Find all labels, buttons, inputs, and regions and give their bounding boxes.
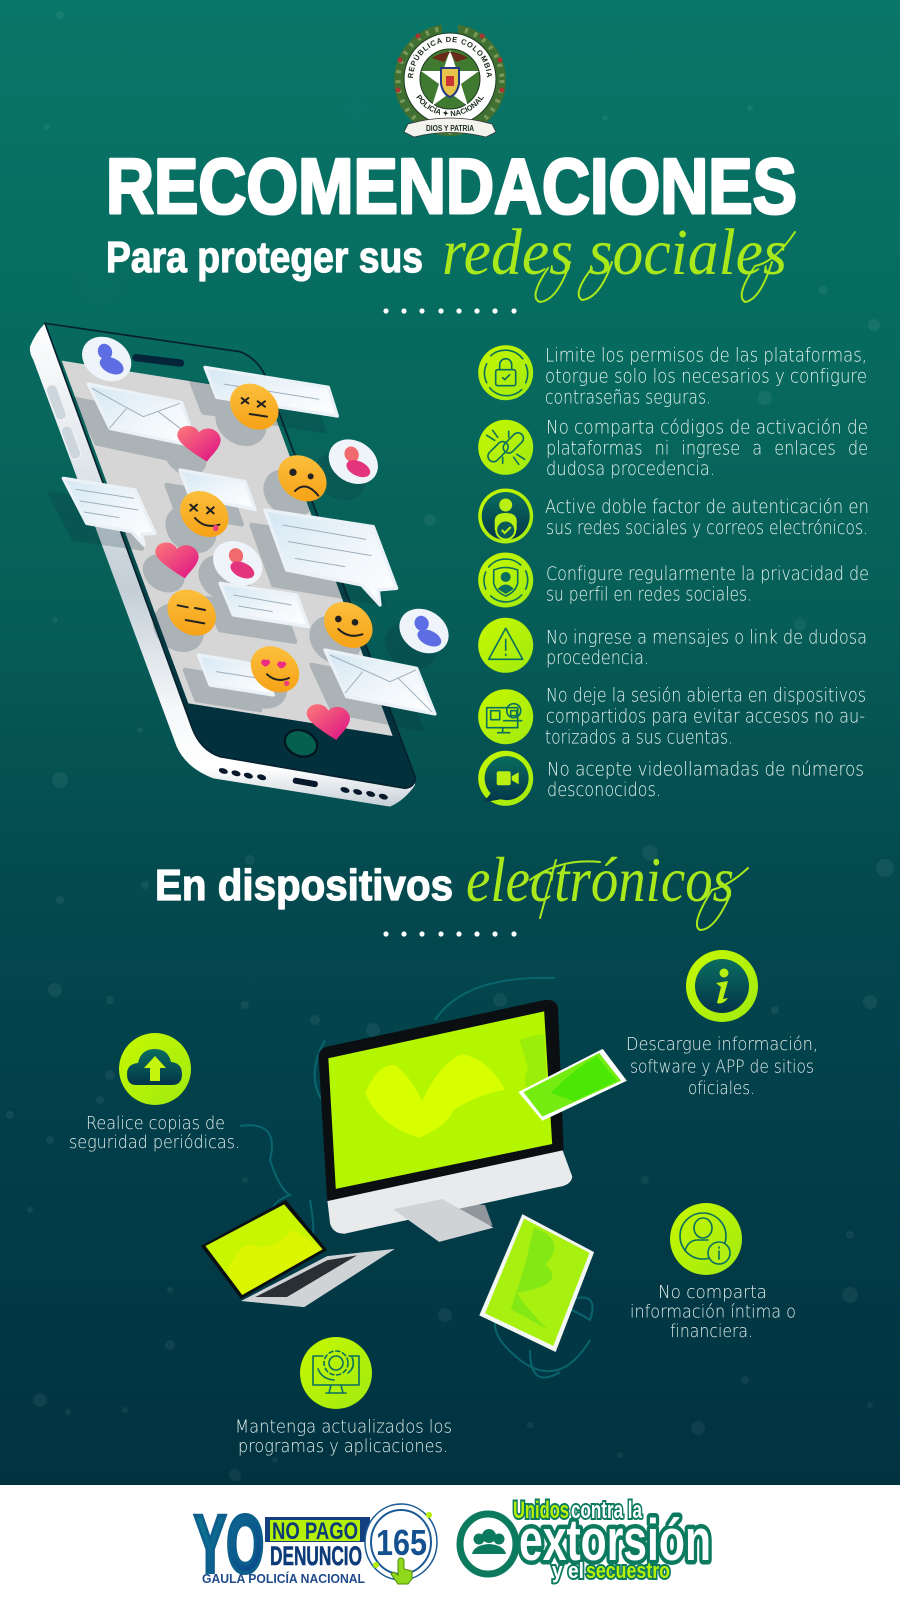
text: procedencia. bbox=[546, 648, 649, 669]
heart middle bbox=[155, 543, 199, 578]
avatar pink center bbox=[205, 532, 271, 595]
connecting swirl lines bbox=[240, 978, 592, 1378]
icon: broken chain bbox=[478, 420, 533, 475]
subtitle white: Para proteger sus bbox=[106, 233, 423, 282]
icon: video chat bbox=[478, 751, 533, 806]
165 badge bbox=[365, 1504, 437, 1580]
screen wave bbox=[365, 1054, 505, 1138]
divider dots bbox=[383, 308, 517, 314]
monitor chin bbox=[327, 1150, 572, 1234]
YO letters: YO bbox=[194, 1499, 264, 1590]
monitor stand back bbox=[453, 1201, 492, 1228]
item 3: doble factor bbox=[478, 488, 869, 544]
icon: warning triangle bbox=[478, 618, 533, 673]
ribbon: DIOS Y PATRIA bbox=[426, 124, 474, 133]
text: Realice copias de bbox=[86, 1113, 225, 1134]
text: información íntima o bbox=[630, 1302, 796, 1322]
device tip: info bbox=[626, 950, 818, 1099]
text: financiera. bbox=[670, 1321, 753, 1342]
monitor screen bbox=[328, 1011, 552, 1189]
seal text: REPÚBLICA DE COLOMBIA bbox=[408, 36, 492, 78]
text: torizados a sus cuentas. bbox=[545, 727, 733, 748]
heart top bbox=[177, 426, 221, 462]
text bbox=[545, 686, 866, 748]
logo: unidos contra la extorsión bbox=[460, 1497, 711, 1583]
subtitle script: redes sociales: redes sociales bbox=[442, 216, 787, 289]
secuestro: secuestro bbox=[586, 1558, 670, 1583]
text: No comparta bbox=[658, 1282, 767, 1303]
emoji dizzy bbox=[221, 374, 288, 439]
bubble left bbox=[63, 478, 155, 545]
ring with people icon bbox=[460, 1514, 516, 1574]
side buttons bbox=[45, 383, 82, 461]
text bbox=[545, 346, 867, 408]
text: Mantenga actualizados los bbox=[235, 1417, 452, 1438]
text: contraseñas seguras. bbox=[545, 388, 711, 408]
screen blob right bbox=[519, 1034, 548, 1101]
tablet bbox=[479, 1214, 594, 1352]
monitor frame bbox=[319, 1000, 564, 1201]
icon: user check bbox=[478, 488, 533, 544]
text bbox=[69, 1113, 240, 1153]
element shadows bbox=[50, 382, 442, 729]
section heading script: electrónicos: electrónicos bbox=[466, 844, 734, 915]
divider dots bbox=[383, 931, 517, 937]
text: No acepte videollamadas de números bbox=[547, 760, 864, 781]
unidos: Unidos bbox=[513, 1497, 569, 1524]
text: Active doble factor de autenticación en bbox=[545, 497, 869, 518]
emoji tongue bbox=[171, 481, 238, 547]
text: Descargue información, bbox=[626, 1034, 818, 1055]
extorsión: extorsión bbox=[519, 1508, 711, 1573]
wreath bbox=[394, 20, 506, 136]
heart bottom bbox=[307, 704, 350, 740]
seal lower text: POLICÍA ✦ NACIONAL bbox=[416, 94, 484, 116]
screen bbox=[62, 361, 393, 736]
text: seguridad periódicas. bbox=[69, 1132, 240, 1153]
item 2: enlaces bbox=[478, 418, 868, 480]
speaker bbox=[132, 354, 185, 367]
small phone bbox=[518, 1049, 627, 1121]
y el: y el bbox=[552, 1558, 584, 1583]
section heading white: En dispositivos bbox=[155, 861, 453, 910]
device tip: updates bbox=[235, 1337, 452, 1457]
inner green disc bbox=[420, 49, 480, 109]
police emblem bbox=[394, 24, 506, 138]
flourishes bbox=[536, 232, 795, 302]
envelope top bbox=[88, 384, 197, 447]
bubble center bbox=[180, 470, 255, 509]
devices illustration bbox=[201, 1000, 627, 1352]
text: dudosa procedencia. bbox=[546, 459, 715, 480]
icon: info bbox=[686, 950, 758, 1022]
text: Limite los permisos de las plataformas, bbox=[545, 346, 867, 366]
white footer bbox=[0, 1485, 900, 1600]
speaker holes and port bbox=[218, 767, 389, 801]
avatar pink right bbox=[320, 430, 386, 493]
icon: cloud upload bbox=[119, 1033, 191, 1105]
item 7: videollamadas bbox=[478, 751, 864, 806]
envelope bottom bbox=[325, 650, 435, 714]
icon: padlock bbox=[478, 345, 533, 400]
text bbox=[547, 760, 864, 801]
bubble lower bbox=[198, 655, 273, 695]
logo: yo no pago yo denuncio bbox=[194, 1499, 437, 1590]
avatar blue right bbox=[391, 600, 457, 662]
emoji hearts bbox=[242, 637, 308, 702]
emoji smile bbox=[315, 592, 382, 658]
no pago box: NO PAGO bbox=[272, 1518, 358, 1545]
icon: computer lock bbox=[478, 689, 533, 744]
star and shield bbox=[421, 50, 479, 106]
bubble top right bbox=[205, 367, 337, 416]
bezel bbox=[45, 323, 415, 788]
stand front bbox=[393, 1199, 494, 1242]
emoji neutral bbox=[158, 580, 225, 645]
item 6: sesión bbox=[478, 686, 866, 748]
avatar blue top bbox=[74, 328, 140, 390]
text bbox=[626, 1034, 818, 1099]
text bbox=[630, 1282, 796, 1342]
text bbox=[545, 497, 869, 539]
monitor bbox=[319, 1000, 572, 1242]
item 4: privacidad bbox=[478, 552, 869, 608]
contra la: contra la bbox=[571, 1497, 642, 1524]
text: programas y aplicaciones. bbox=[238, 1436, 448, 1457]
home button bbox=[281, 725, 321, 761]
text: No comparta códigos de activación de bbox=[546, 418, 868, 438]
item 1: permisos bbox=[478, 345, 867, 408]
text: su perfil en redes sociales. bbox=[546, 585, 752, 606]
phone body bbox=[30, 323, 415, 807]
flourishes bbox=[530, 860, 748, 930]
big bubble bbox=[265, 510, 397, 605]
white seal ring bbox=[404, 33, 496, 125]
denuncio: DENUNCIO bbox=[270, 1541, 362, 1571]
smartphone illustration bbox=[30, 323, 457, 807]
hand pointer bbox=[391, 1558, 412, 1584]
icon: shield profile bbox=[478, 552, 533, 608]
emoji sad bbox=[269, 446, 336, 511]
recommendation list bbox=[478, 345, 869, 806]
device tip: private data bbox=[630, 1203, 796, 1342]
text: desconocidos. bbox=[547, 780, 661, 801]
165 badge: 165 bbox=[376, 1522, 427, 1563]
icon: user info bbox=[670, 1203, 742, 1275]
text bbox=[546, 418, 868, 480]
title: RECOMENDACIONES bbox=[106, 142, 797, 230]
text bbox=[546, 627, 867, 669]
item 5: link bbox=[478, 618, 867, 673]
bubble lower center bbox=[220, 583, 308, 627]
text bbox=[546, 564, 869, 606]
laptop bbox=[201, 1200, 395, 1307]
device tip: backup bbox=[69, 1033, 240, 1153]
text: software y APP de sitios bbox=[630, 1057, 814, 1078]
text bbox=[235, 1417, 452, 1457]
gaula caption: GAULA POLICÍA NACIONAL bbox=[202, 1571, 365, 1586]
text: otorgue solo los necesarios y configure bbox=[545, 366, 867, 388]
text: oficiales. bbox=[688, 1078, 755, 1099]
icon: gear monitor bbox=[300, 1337, 372, 1409]
